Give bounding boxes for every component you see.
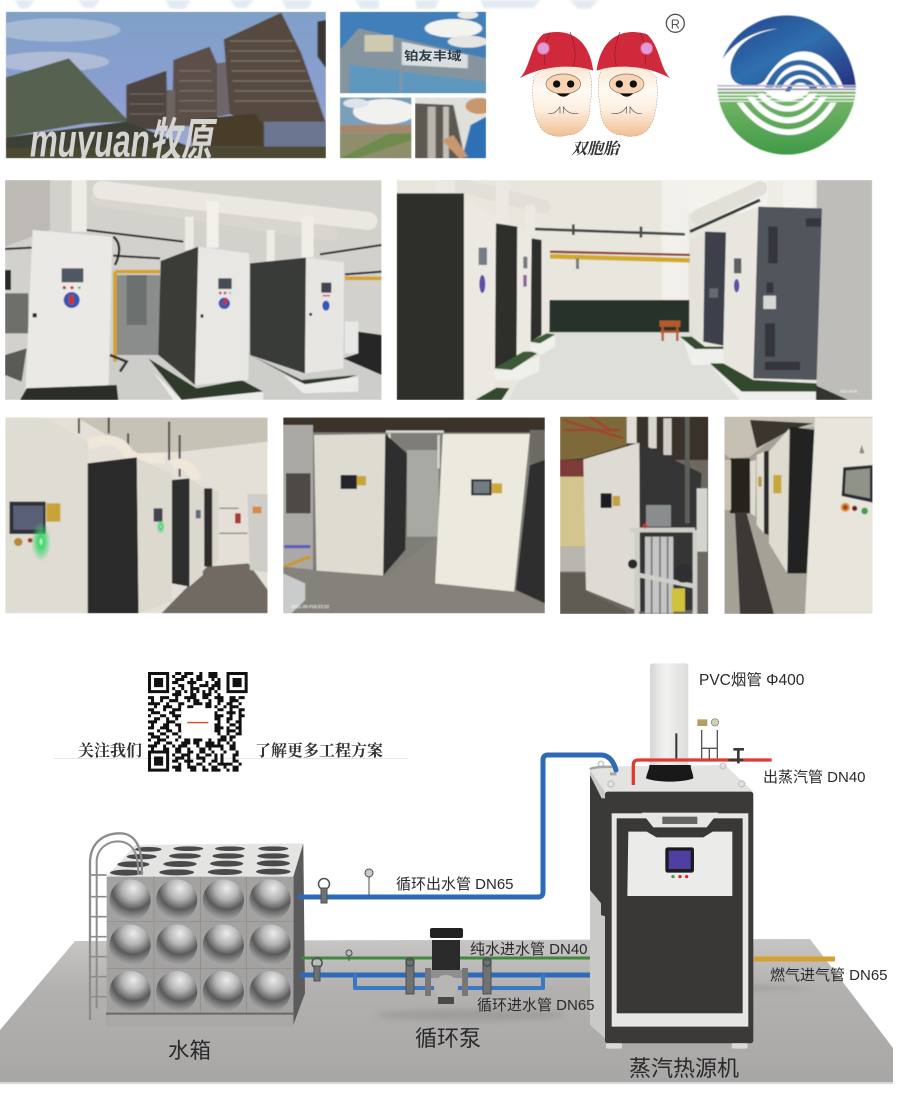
learn more text: 了解更多工程方案 [255,741,383,760]
feet [606,1043,622,1049]
machine front [605,792,753,1043]
outlet pipe valve and gauge [318,869,373,903]
ducts right [698,188,760,217]
icon: registered mark: R [671,17,680,31]
aisle cabinets [750,460,756,517]
heater radiators [345,322,358,353]
photo: boilers with green indicator [5,417,268,613]
ladder [90,833,142,1020]
photo: narrow aisle with floor drain [724,417,873,614]
cabinet 2 [88,457,139,613]
photo: roadside view [340,97,416,158]
logo: twin piglets with red caps [519,14,684,159]
label: PVC flue: PVC烟管 Φ400 [699,671,805,689]
circulation pump [425,928,468,1004]
photo: two open cabinets in shed: 2021.09 #18:23:22 [291,604,330,609]
QR centre logo [181,708,214,738]
water connector [590,767,615,774]
circulation inlet pipe [302,972,590,978]
tank base [106,1013,293,1027]
label: circulation outlet: 循环出水管 DN65 [396,876,514,893]
pyramid [6,58,129,137]
cabinet front [583,443,640,612]
orange stool [661,322,679,341]
pump right valves [483,958,491,994]
water treatment [646,505,671,527]
gas pipe [754,956,835,962]
floor [283,566,545,614]
right column [817,180,872,400]
lower pipes [302,958,835,988]
logo: blue and green circle [716,14,856,156]
cabinet 1 [25,230,112,400]
QR code block [54,672,408,772]
lifting eyes [598,761,745,787]
QR code [148,672,248,772]
label: steam heat source machine: 蒸汽热源机 [629,1056,739,1081]
floor drain [735,513,774,614]
photo: worker at cabinet [415,97,493,158]
pump left valves [406,958,414,994]
valves and gauges on lines [312,950,491,994]
wall dado [549,300,689,332]
front grass platform [710,363,817,392]
grass and platforms [148,358,263,400]
tank front [107,877,293,1013]
background watermark [15,0,598,9]
floor [508,332,743,400]
pipes over [386,432,444,468]
pump bypass [355,975,543,988]
cabinet right [435,434,530,592]
cabinet 3 [172,478,189,587]
tank side [293,843,305,1025]
steam valve and gauges [697,719,744,763]
domes [109,879,291,1012]
steam heat source machine [590,663,772,1049]
ducts left [440,180,468,181]
label: water tank: 水箱 [168,1039,211,1063]
photo: three boilers under white ducts [5,180,382,400]
wall lines [5,230,382,274]
cabinet 3 [250,258,306,373]
floor [0,939,893,1084]
divider under follow text [54,758,408,759]
sign lettering: 铂友丰域 [404,49,462,63]
cabinet 2 [158,247,198,385]
outlet gauge [365,869,373,896]
photo: company sign building [340,11,488,93]
photo: boiler room corridor: 2021·04·08 [840,389,857,393]
steam outlet pipe [633,760,772,785]
circulation outlet pipe [300,755,616,897]
photo: headquarters building [0,12,326,167]
machine side [590,770,605,1038]
vertical flues [72,180,87,232]
label: steam outlet: 出蒸汽管 DN40 [763,769,866,786]
leaning panels [516,460,545,603]
icon: right piglet [597,32,671,136]
inlet valve [312,958,322,981]
big front cabinet [86,441,88,444]
ducts [98,198,330,233]
label: gas inlet: 燃气进气管 DN65 [770,966,888,984]
photo: boiler with water treatment [560,417,708,614]
wall piping [535,229,685,234]
touchscreen [665,847,694,878]
tank top [107,843,303,877]
label: pure water inlet: 纯水进水管 DN40 [470,941,588,958]
green line gauge [346,950,352,961]
left cabinets [397,193,464,400]
icon: left piglet [519,32,593,136]
photo: headquarters building: muyuan牧原 [30,115,217,167]
front cabinet [805,417,873,614]
photo: boiler room corridor [397,180,872,400]
photo: two open cabinets in shed [283,417,545,613]
water tank [90,833,305,1027]
icon: registered mark [666,14,684,32]
duct roll [283,573,305,613]
brand name: 双胞胎 [571,136,623,159]
chimney [646,663,693,782]
nameplate [662,817,697,824]
cabinet dark side [639,443,702,612]
cabinet 4 [204,488,212,567]
pure water inlet pipe [303,956,590,960]
follow us text: 关注我们 [78,741,142,760]
outlet valve [318,878,330,903]
machine body top [590,765,753,792]
label: circulation inlet: 循环进水管 DN65 [477,997,595,1014]
towers [126,71,168,130]
cabinet left [383,434,407,576]
label: circulation pump: 循环泵 [415,1026,481,1051]
right cabinets [688,255,690,332]
